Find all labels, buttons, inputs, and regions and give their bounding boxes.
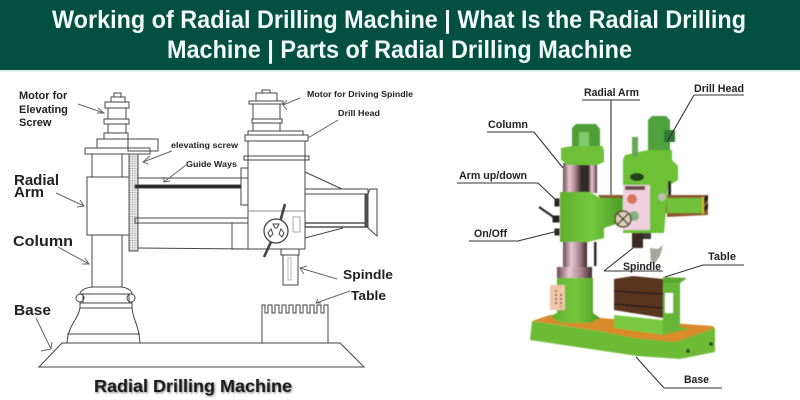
diagram: far arm end [305, 172, 377, 238]
diagram: handwheel [264, 204, 288, 257]
machine: handwheel [615, 211, 631, 227]
label: Radial Arm: Radial [14, 172, 59, 189]
machine: head motor [648, 116, 675, 150]
label: elevating screw: elevating screw [171, 140, 238, 150]
diagram: radial arm sleeve [87, 177, 129, 235]
label: Motor for Driving Spindle: Motor for Driving Spindle [307, 89, 413, 99]
diagram: table with T-slots [262, 305, 328, 343]
machine: spindle and chuck [632, 233, 663, 263]
diagram: radial arm rails [135, 168, 248, 249]
label: Radial Arm: Radial Arm [584, 87, 639, 99]
label: Column: Column [13, 233, 73, 250]
machine: drill head [623, 137, 678, 233]
label: Motor for Elevating Screw: Motor for [19, 90, 68, 102]
panel: photo-style green machine [457, 83, 744, 388]
machine: column foot and nameplate [550, 267, 600, 323]
diagram: drill head [244, 131, 309, 249]
machine: column [563, 163, 597, 267]
diagram: elevating screw [129, 154, 138, 251]
label: Guide Ways: Guide Ways [186, 159, 237, 169]
label: Spindle: Spindle [623, 261, 661, 273]
title banner: Working of Radial Drilling Machine | What Is the Radial Drilling [52, 6, 746, 34]
title banner [0, 0, 800, 72]
label: Base: Base [14, 302, 51, 319]
arrows: diagram callouts [36, 98, 350, 351]
diagram caption: Radial Drilling Machine [95, 377, 293, 397]
label: On/Off: On/Off [474, 228, 507, 240]
panel: line diagram of radial drilling machine [13, 89, 413, 397]
callout leaders [457, 95, 744, 388]
machine: column top and motor [561, 124, 604, 165]
label: Radial Arm: Arm [14, 184, 44, 201]
machine: arm levers [539, 199, 559, 235]
label: Arm up/down: Arm up/down [459, 170, 527, 182]
diagram caption: Radial Drilling Machine [94, 376, 292, 396]
label: Drill Head: Drill Head [338, 108, 380, 118]
title banner: Machine | Parts of Radial Drilling Machine [167, 36, 632, 64]
label: Spindle: Spindle [343, 267, 393, 282]
label: Motor for Elevating Screw: Elevating [19, 104, 68, 116]
diagram: spindle [281, 249, 299, 285]
label: Table: Table [351, 288, 386, 303]
label: Base: Base [684, 374, 709, 386]
diagram: elevating motor [85, 93, 158, 154]
machine: base plate [530, 315, 715, 359]
machine artwork [530, 116, 715, 359]
machine: table [614, 276, 690, 335]
machine: sleeve [560, 192, 622, 242]
label: Column: Column [488, 119, 528, 131]
diagram: spindle motor [249, 90, 283, 131]
label: Table: Table [708, 251, 736, 263]
label: Motor for Elevating Screw: Screw [19, 117, 52, 129]
machine: radial arm [598, 195, 708, 219]
diagram: column and bell foot [67, 154, 140, 343]
label: Drill Head: Drill Head [694, 83, 744, 95]
diagram: base plate [39, 343, 364, 367]
